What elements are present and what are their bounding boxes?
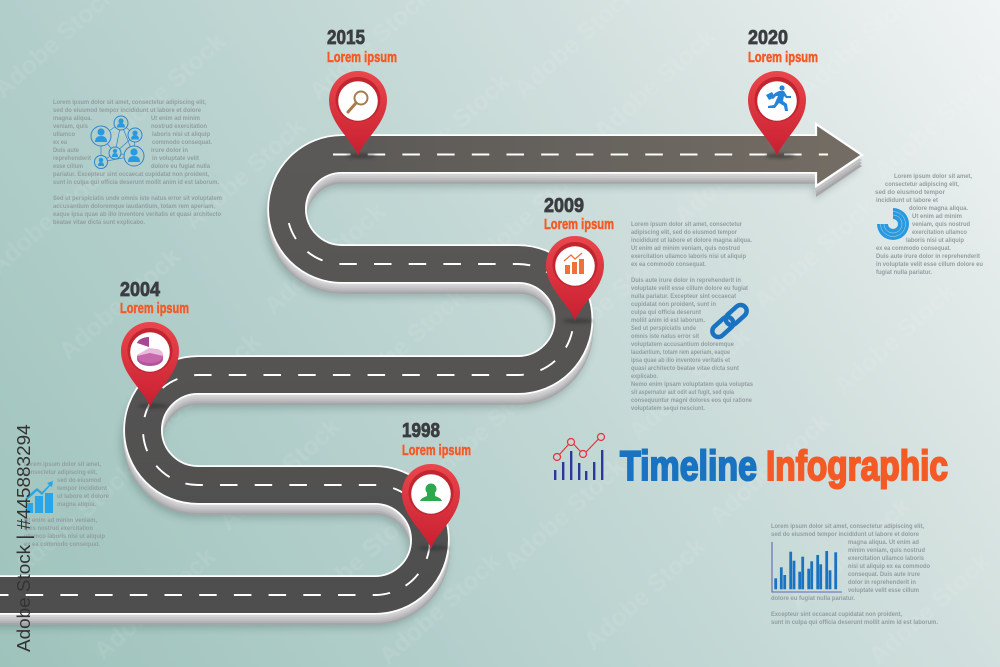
year label 2004: 2004	[120, 279, 161, 301]
text block: top left: sed do eiusmod tempor incididunt ut labore et dolore	[53, 107, 201, 114]
text block: top left: magna aliqua.	[53, 115, 92, 122]
text: Adobe Stock	[784, 492, 916, 616]
icon: running man	[766, 85, 791, 111]
text block: lower left: quis nostrud exercitation	[24, 525, 93, 532]
text block: far right: dolore magna aliqua.	[909, 205, 968, 212]
year label 2015	[327, 27, 397, 66]
text: Adobe Stock	[99, 27, 231, 151]
text block: far right: Lorem ipsum dolor sit amet,	[894, 173, 972, 180]
pin: 2015	[329, 71, 387, 158]
text block: centre right: Sed ut perspiciatis unde	[631, 325, 696, 332]
text block: centre right: laudantium, totam rem aperiam, eaque	[631, 349, 730, 356]
text block: lower left: ut labore et dolore	[57, 493, 109, 500]
text block: centre right: ex ea commodo consequat.	[631, 261, 706, 268]
text: Adobe Stock	[374, 547, 506, 667]
text: Adobe Stock	[829, 277, 961, 401]
year label 2020: Lorem ipsum	[748, 50, 818, 66]
text block: top left: eaque ipsa quae ab illo inventore veritatis et quasi architecto	[53, 211, 221, 218]
text block: centre right: consequuntur magni dolores eos qui ratione	[631, 397, 752, 404]
text block: top left: esse cillum	[53, 163, 83, 170]
text block: centre right: cupidatat non proident, sunt in	[631, 301, 716, 308]
text block: centre right: Ut enim ad minim veniam, quis nostrud	[631, 245, 740, 252]
text block: lower left	[24, 461, 109, 548]
text block: centre right: mollit anim id est laborum.	[631, 317, 705, 324]
year label 2004	[120, 279, 189, 317]
icon: pie chart	[137, 337, 163, 366]
icon: person	[420, 484, 442, 501]
pin: 2004	[121, 322, 179, 408]
text block: centre right: voluptatem sequi nesciunt.	[631, 405, 705, 412]
text block: centre right: culpa qui officia deserunt	[631, 309, 702, 316]
year label 2009: Lorem ipsum	[544, 217, 614, 233]
road shadow	[0, 137, 860, 608]
text: Adobe Stock	[54, 242, 186, 366]
text block: top left: beatae vitae dicta sunt explicabo.	[53, 219, 145, 226]
year label 2004: Lorem ipsum	[120, 301, 189, 317]
text block: lower right: consequat. Duis aute irure	[848, 571, 920, 578]
text block: lower right: sed do eiusmod tempor incididunt ut labore et dolore	[771, 531, 919, 538]
text: Adobe Stock	[749, 192, 881, 316]
text block: top left: veniam, quis	[53, 123, 88, 130]
text block: far right: in voluptate velit esse cillum dolore eu	[876, 261, 983, 268]
text block: centre right: voluptatem accusantium doloremque	[631, 341, 734, 348]
year label 2015: Lorem ipsum	[327, 50, 397, 66]
text: Adobe Stock	[134, 327, 266, 451]
text: Adobe Stock	[704, 407, 836, 531]
text block: top left: in voluptate velit	[152, 155, 200, 162]
text block: centre right: voluptate velit esse cillum dolore eu fugiat	[631, 285, 749, 292]
text: Adobe Stock	[214, 412, 346, 536]
text block: centre right: quasi architecto beatae vitae dicta sunt	[631, 365, 740, 372]
icon: title chart	[554, 434, 604, 480]
text block: lower left: consectetur adipiscing elit,	[24, 469, 97, 476]
text block: centre right: exercitation ullamco laboris nisi ut aliquip	[631, 253, 746, 260]
text block: top left: Ut enim ad minim	[151, 115, 200, 122]
text block: top left: Lorem ipsum dolor sit amet, consectetur adipiscing elit,	[53, 99, 206, 106]
text block: lower right: nisi ut aliquip ex ea commodo	[848, 563, 930, 570]
text block: lower right	[771, 523, 938, 626]
text block: centre right: Lorem ipsum dolor sit amet, consectetur	[631, 221, 743, 228]
icon: growth chart	[26, 481, 53, 513]
year label 2009: 2009	[544, 195, 584, 217]
text: Adobe Stock	[624, 322, 756, 446]
text block: centre right: Duis aute irure dolor in reprehenderit in	[631, 277, 741, 284]
text block: lower left: sed do eiusmod	[57, 477, 101, 484]
text: Adobe Stock	[179, 112, 311, 236]
text block: far right: Duis aute irure dolor in reprehenderit	[876, 253, 981, 260]
text block: far right: exercitation ullamco	[912, 229, 967, 236]
text block: centre right: adipiscing elit, sed do eiusmod tempor	[631, 229, 737, 236]
text block: centre right: Nemo enim ipsam voluptatem quia voluptas	[631, 381, 753, 388]
text block: top left: reprehenderit	[53, 155, 92, 162]
icon: chain link	[710, 302, 749, 340]
year label 2020	[748, 27, 818, 66]
text block: top left: Sed ut perspiciatis unde omnis iste natus error sit voluptatem	[53, 195, 222, 202]
text block: centre right: sit aspernatur aut odit aut fugit, sed quia	[631, 389, 734, 396]
text block: lower right: sunt in culpa qui officia deserunt mollit anim id est laborum.	[771, 619, 938, 626]
text block: top left: ex ea	[53, 139, 67, 146]
icon: people network	[91, 116, 144, 168]
title: Timeline	[620, 442, 757, 489]
text block: lower left: Ut enim ad minim veniam,	[24, 517, 97, 524]
text block: top left: Duis aute	[53, 147, 79, 154]
text block: top left: irure dolor in	[151, 147, 188, 154]
text block: top left: pariatur. Excepteur sint occaecat cupidatat non proident,	[53, 171, 209, 178]
text: Adobe Stock	[544, 237, 676, 361]
text: Adobe Stock	[294, 497, 426, 621]
text block: centre right: explicabo.	[631, 373, 658, 380]
text block: far right: fugiat nulla pariatur.	[876, 269, 932, 276]
text: Adobe Stock	[864, 547, 996, 667]
text block: top left: accusantium doloremque laudantium, totam rem aperiam,	[53, 203, 215, 210]
text block: far right	[875, 173, 983, 276]
pin: 2009	[546, 236, 604, 324]
year label 1998: Lorem ipsum	[402, 443, 471, 459]
icon: bar chart	[772, 542, 842, 592]
text: Adobe Stock	[384, 67, 516, 191]
text: Adobe Stock	[669, 107, 801, 231]
text block: top left: sunt in culpa qui officia deserunt mollit anim id est laborum.	[53, 179, 219, 186]
icon: magnifier	[348, 92, 368, 112]
text block: lower right: minim veniam, quis nostrud	[848, 547, 925, 554]
text block: centre right: incididunt ut labore et dolore magna aliqua.	[631, 237, 752, 244]
text block: centre right: nulla pariatur. Excepteur sint occaecat	[631, 293, 737, 300]
year label 1998: 1998	[402, 420, 440, 442]
text block: lower right: dolor in reprehenderit in	[848, 579, 916, 586]
road surface	[0, 124, 862, 595]
text block: top left: ullamco	[53, 131, 75, 138]
text block: top left	[53, 99, 222, 226]
text: Adobe Stock	[89, 542, 221, 666]
text: Adobe Stock	[579, 532, 711, 656]
text block: top left: nostrud exercitation	[151, 123, 207, 130]
year label 2015: 2015	[327, 27, 365, 49]
text block: lower right: voluptate velit esse cillum	[848, 587, 919, 594]
text block: lower left: ex ea commodo consequat.	[24, 541, 100, 548]
title: Infographic	[766, 442, 948, 489]
year label 2020: 2020	[748, 27, 788, 49]
text block: lower left: Lorem ipsum dolor sit amet,	[24, 461, 101, 468]
text block: far right: veniam, quis nostrud	[912, 221, 970, 228]
text block: top left: laboris nisi ut aliquip	[152, 131, 210, 138]
text: Adobe Stock	[464, 152, 596, 276]
pin: 2020	[748, 71, 806, 158]
road	[0, 124, 862, 608]
icon: rising chart	[564, 253, 584, 274]
text block: top left: commodo consequat.	[152, 139, 212, 146]
text: Adobe Stock	[499, 452, 631, 576]
text: Adobe Stock	[259, 197, 391, 321]
text block: lower left: ullamco laboris nisi ut aliquip	[24, 533, 105, 540]
text block: lower right: magna aliqua. Ut enim ad	[848, 539, 919, 546]
lane dashes	[0, 154, 828, 595]
text block: lower right: Lorem ipsum dolor sit amet, consectetur adipiscing elit,	[771, 523, 924, 530]
text block: lower right: Excepteur sint occaecat cupidatat non proident,	[771, 611, 902, 618]
text block: centre right: omnis iste natus error sit	[631, 333, 700, 340]
text block: far right: Ut enim ad minim	[912, 213, 962, 220]
text block: far right: sed do eiusmod tempor	[875, 189, 946, 196]
text block: far right: incididunt ut labore et	[876, 197, 939, 204]
icon: partial donut chart	[877, 208, 909, 240]
text block: lower right: exercitation ullamco laboris	[848, 555, 924, 562]
year label 2009	[544, 195, 614, 233]
text block: top left: dolore eu fugiat nulla	[151, 163, 210, 170]
text block: centre right: ipsa quae ab illo inventore veritatis et	[631, 357, 731, 364]
year label 1998	[402, 420, 471, 459]
pin: 1998	[402, 464, 460, 550]
text block: centre right	[631, 221, 753, 412]
title	[620, 442, 948, 489]
text block: lower left: magna aliqua.	[57, 501, 96, 508]
text block: lower left: tempor incididunt	[57, 485, 108, 492]
text: Adobe Stock	[419, 367, 551, 491]
text: Adobe Stock	[869, 62, 1000, 186]
road side wall	[0, 126, 862, 605]
text block: far right: ex ea commodo consequat.	[876, 245, 951, 252]
text block: far right: consectetur adipiscing elit,	[885, 181, 959, 188]
text block: lower right: dolore eu fugiat nulla pariatur.	[771, 595, 855, 602]
vertical stock id: Adobe Stock | #445883294	[14, 424, 35, 652]
text: Adobe Stock	[589, 22, 721, 146]
text: Adobe Stock	[339, 282, 471, 406]
text: Adobe Stock	[9, 457, 141, 581]
text block: far right: laboris nisi ut aliquip	[906, 237, 964, 244]
